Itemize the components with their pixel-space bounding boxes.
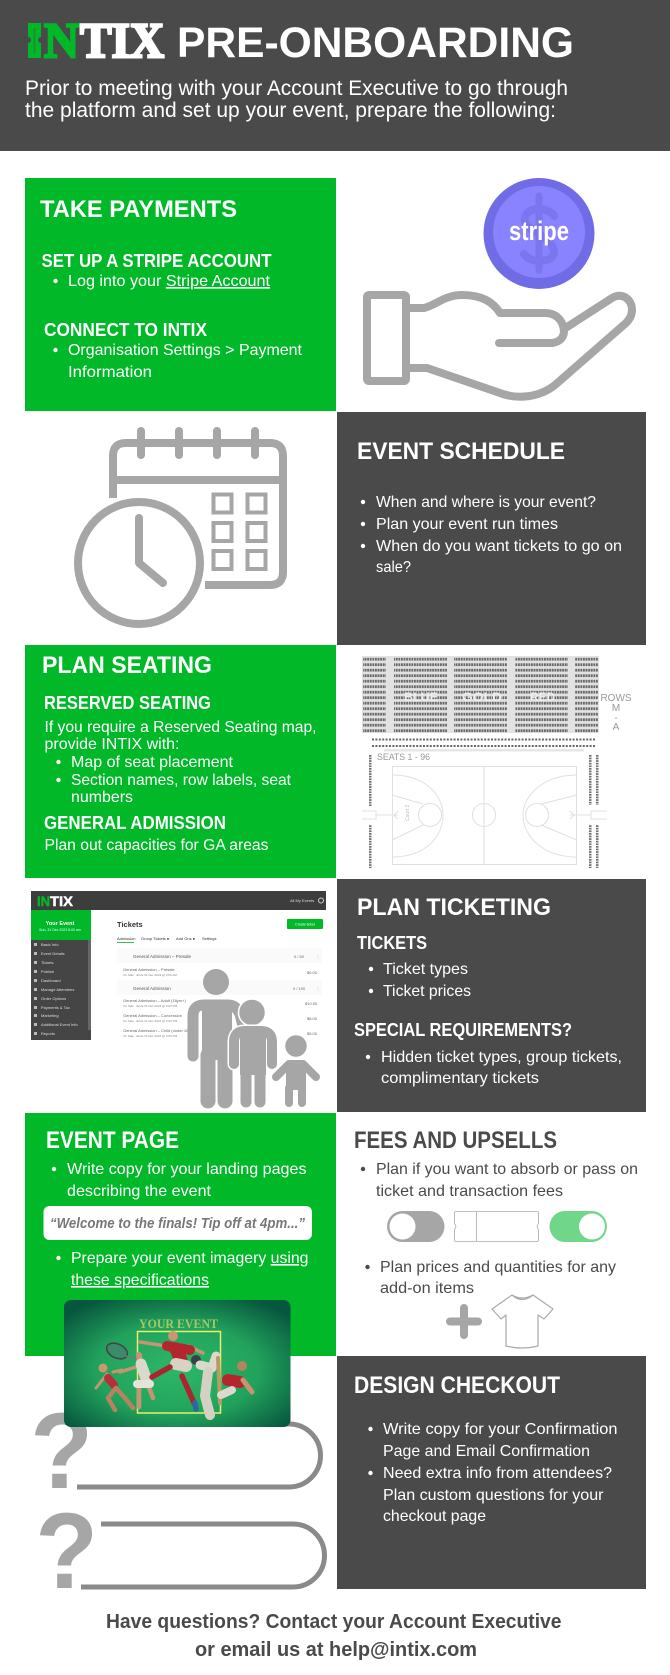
icon: calendar and clock xyxy=(78,431,283,624)
logo: INTIX: N xyxy=(44,12,79,68)
bullet: absorb or pass on fees xyxy=(361,1161,638,1200)
checkout bullets: Need extra info from attendees? xyxy=(383,1465,612,1482)
special requirements bullet xyxy=(366,1049,622,1087)
dashboard screenshot: General Admission – Presale xyxy=(133,954,192,959)
bullet: add-on items: Plan prices and quantities for any xyxy=(380,1259,616,1276)
reserved seating text: numbers xyxy=(71,789,133,806)
dashboard screenshot: General Admission – Child (under 16yrs) xyxy=(123,1028,196,1033)
icon: toggle on xyxy=(550,1211,607,1242)
dashboard screenshot: Group Tickets ● xyxy=(141,936,170,941)
bullet: log into stripe: Log into your Stripe Account xyxy=(68,273,271,290)
checkout bullets: Write copy for your Confirmation xyxy=(383,1421,618,1438)
dashboard screenshot: Order Options xyxy=(41,996,66,1001)
seating map: A xyxy=(613,722,620,733)
icon: t-shirt xyxy=(492,1295,553,1348)
seating map: ROWS xyxy=(600,693,632,704)
reserved seating text: Section names, row labels, seat xyxy=(71,772,292,789)
footer contact text xyxy=(106,1611,562,1661)
special requirements bullet: complimentary tickets xyxy=(381,1070,539,1087)
dashboard screenshot: On Sale · Ends 31 Dec 2023 @ 9:00 PM xyxy=(123,1004,178,1008)
dashboard screenshot: Event Details xyxy=(41,951,65,956)
dashboard screenshot: General Admission xyxy=(133,986,171,991)
dashboard screenshot: Additional Event Info xyxy=(41,1022,78,1027)
bullet: add-on items: add-on items xyxy=(380,1280,474,1297)
icon: open hand xyxy=(367,295,632,397)
seating map: RED xyxy=(530,690,555,704)
bullet: add-on items xyxy=(365,1259,616,1297)
runner xyxy=(98,1364,108,1372)
subheading: reserved seating: RESERVED SEATING xyxy=(44,693,211,713)
bullet: absorb or pass on fees: ticket and transaction fees xyxy=(376,1183,563,1200)
schedule bullets: When do you want tickets to go on xyxy=(376,538,622,555)
logo: INTIX xyxy=(28,12,164,68)
tickets bullets: Ticket types xyxy=(383,961,468,978)
dashboard screenshot: Tickets xyxy=(117,920,143,929)
subheading: tickets: TICKETS xyxy=(357,933,427,953)
title: PRE-ONBOARDING xyxy=(177,19,574,67)
dashboard screenshot: $0.00 xyxy=(307,970,318,975)
seating map: BLUE xyxy=(404,690,438,704)
kicker xyxy=(168,1331,178,1341)
event image xyxy=(64,1300,290,1427)
bullet: event imagery xyxy=(56,1250,308,1289)
adult figure xyxy=(193,969,243,1101)
dashboard screenshot: $8.00 xyxy=(307,1016,318,1021)
quote box xyxy=(44,1206,312,1240)
heading: design checkout: DESIGN CHECKOUT xyxy=(354,1372,560,1399)
heading: plan ticketing: PLAN TICKETING xyxy=(357,894,551,921)
dashboard screenshot: Settings xyxy=(202,936,216,941)
dashboard screenshot: Basic Info xyxy=(41,942,59,947)
cricketer xyxy=(191,1355,201,1365)
icon: family of three xyxy=(193,969,316,1103)
question mark input 1 xyxy=(30,1390,321,1511)
panel: take payments xyxy=(25,178,336,411)
schedule bullets: sale? xyxy=(376,559,411,576)
bullet: landing page copy xyxy=(52,1161,306,1200)
schedule bullets: Plan your event run times xyxy=(376,516,558,533)
logo: INTIX: TIX xyxy=(80,12,164,68)
dashboard screenshot: $10.00 xyxy=(305,1001,318,1006)
dashboard screenshot: General Admission – Presale xyxy=(123,967,175,972)
tickets bullets xyxy=(369,961,471,1000)
bullet: event imagery: Prepare your event imagery using xyxy=(71,1250,308,1267)
checkout bullets xyxy=(368,1421,618,1525)
heading: fees and upsells: FEES AND UPSELLS xyxy=(354,1127,557,1154)
bullet: organisation settings: Organisation Settings > Payment xyxy=(68,342,303,359)
dashboard screenshot: IN xyxy=(37,893,50,909)
bullet: organisation settings: Information xyxy=(68,364,152,381)
dashboard screenshot: $5.00 xyxy=(307,1031,318,1036)
dashboard screenshot: Manage Attendees xyxy=(41,987,74,992)
dashboard screenshot: All My Events xyxy=(290,898,314,903)
question mark input 2: ? xyxy=(35,1490,98,1611)
bullet: organisation settings xyxy=(53,342,303,381)
question mark input 2 xyxy=(35,1490,325,1611)
icon: ticket outline xyxy=(454,1212,538,1242)
dashboard screenshot: ⋮ xyxy=(316,954,320,959)
header band xyxy=(0,0,670,151)
bullet: event imagery: these specifications xyxy=(71,1272,209,1289)
quote box: “Welcome to the finals! Tip off at 4pm...” xyxy=(50,1215,305,1232)
icon: stripe coin: stripe xyxy=(509,216,569,246)
general admission text: Plan out capacities for GA areas xyxy=(44,837,268,854)
intro text xyxy=(25,77,568,122)
subheading: general admission: GENERAL ADMISSION xyxy=(44,813,226,833)
seating map: Court 2 xyxy=(405,804,411,821)
reserved seating text: Map of seat placement xyxy=(71,754,234,771)
older child figure xyxy=(234,999,272,1102)
intro text: Prior to meeting with your Account Executive to go through xyxy=(25,77,568,100)
panel: fees and upsells xyxy=(354,1127,638,1348)
dashboard screenshot: Payments & Tax xyxy=(41,1005,70,1010)
bullet: landing page copy: describing the event xyxy=(67,1183,212,1200)
reserved seating text: provide INTIX with: xyxy=(44,736,180,753)
young child figure xyxy=(276,1034,316,1103)
tickets bullets: Ticket prices xyxy=(383,983,471,1000)
schedule bullets xyxy=(361,494,622,576)
dashboard screenshot: 0 / 50 xyxy=(294,954,305,959)
dashboard screenshot: TIX xyxy=(50,893,74,909)
dashboard screenshot: General Admission – Adult (18yrs+) xyxy=(123,998,186,1003)
icon: plus xyxy=(450,1308,478,1335)
checkout bullets: checkout page xyxy=(383,1508,486,1525)
dashboard screenshot: ⋮ xyxy=(316,986,320,991)
dashboard screenshot: Add Ons ● xyxy=(176,936,196,941)
dashboard screenshot: Tickets xyxy=(41,960,54,965)
bullet: landing page copy: Write copy for your landing pages xyxy=(67,1161,306,1178)
dashboard screenshot: Admission xyxy=(117,936,135,941)
checkout bullets: Page and Email Confirmation xyxy=(383,1443,590,1460)
bullet: absorb or pass on fees: Plan if you want to absorb or pass on xyxy=(376,1161,638,1178)
checkout bullets: Plan custom questions for your xyxy=(383,1487,604,1504)
subheading: set up a stripe account: SET UP A STRIPE ACCOUNT xyxy=(42,251,272,271)
icon: toggle off xyxy=(387,1211,444,1242)
tennis player xyxy=(104,1340,130,1362)
reserved seating text xyxy=(44,719,316,806)
seating map: GOLD xyxy=(462,690,502,704)
panel: plan ticketing xyxy=(337,879,646,1112)
dashboard screenshot: Dashboard xyxy=(41,978,61,983)
intro text: the platform and set up your event, prepare the following: xyxy=(25,99,556,122)
panel: design checkout xyxy=(337,1356,646,1589)
dashboard screenshot: Publish xyxy=(41,969,54,974)
dashboard screenshot: On Sale · Ends 31 Dec 2023 @ 9:00 PM xyxy=(123,1019,178,1023)
footer contact text: Have questions? Contact your Account Executive xyxy=(106,1611,562,1633)
seating map: - xyxy=(614,713,618,724)
dashboard screenshot: Marketing xyxy=(41,1013,59,1018)
heading: plan seating: PLAN SEATING xyxy=(42,652,212,679)
seating map xyxy=(362,656,632,868)
dashboard screenshot xyxy=(31,891,326,1040)
reserved seating text: If you require a Reserved Seating map, xyxy=(44,719,316,736)
footer contact text: or email us at help@intix.com xyxy=(195,1639,477,1661)
dashboard screenshot: On Sale · Ends 31 Dec 2023 @ 9:00 PM xyxy=(123,1034,178,1038)
schedule bullets: When and where is your event? xyxy=(376,494,596,511)
subheading: special requirements: SPECIAL REQUIREMENTS? xyxy=(354,1020,572,1040)
panel: event schedule xyxy=(337,412,646,645)
heading: event schedule: EVENT SCHEDULE xyxy=(357,438,565,465)
heading: take payments: TAKE PAYMENTS xyxy=(40,196,237,223)
seating map: M xyxy=(612,703,620,714)
special requirements bullet: Hidden ticket types, group tickets, xyxy=(381,1049,622,1066)
icon: stripe coin xyxy=(484,178,594,289)
dashboard screenshot: General Admission – Concession xyxy=(123,1013,182,1018)
dashboard screenshot: Your Event xyxy=(46,921,74,927)
subheading: connect to intix: CONNECT TO INTIX xyxy=(44,320,207,340)
dashboard screenshot: 0 / 100 xyxy=(293,986,306,991)
heading: event page: EVENT PAGE xyxy=(46,1127,179,1154)
seating map: SEATS 1 - 96 xyxy=(377,752,430,763)
dashboard screenshot: Create ticket xyxy=(295,922,315,926)
panel: plan seating xyxy=(25,645,336,878)
event image: YOUR EVENT xyxy=(139,1316,218,1331)
panel: event page xyxy=(25,1113,336,1356)
rugby player xyxy=(237,1361,247,1371)
dashboard screenshot: Reports xyxy=(41,1031,55,1036)
dashboard screenshot: On Sale · Ends 31 Dec 2023 @ 9:00 AM xyxy=(123,973,177,977)
question mark input 1: ? xyxy=(30,1390,93,1511)
dashboard screenshot: Sun, 31 Dec 2023 8:00 am xyxy=(39,928,81,932)
